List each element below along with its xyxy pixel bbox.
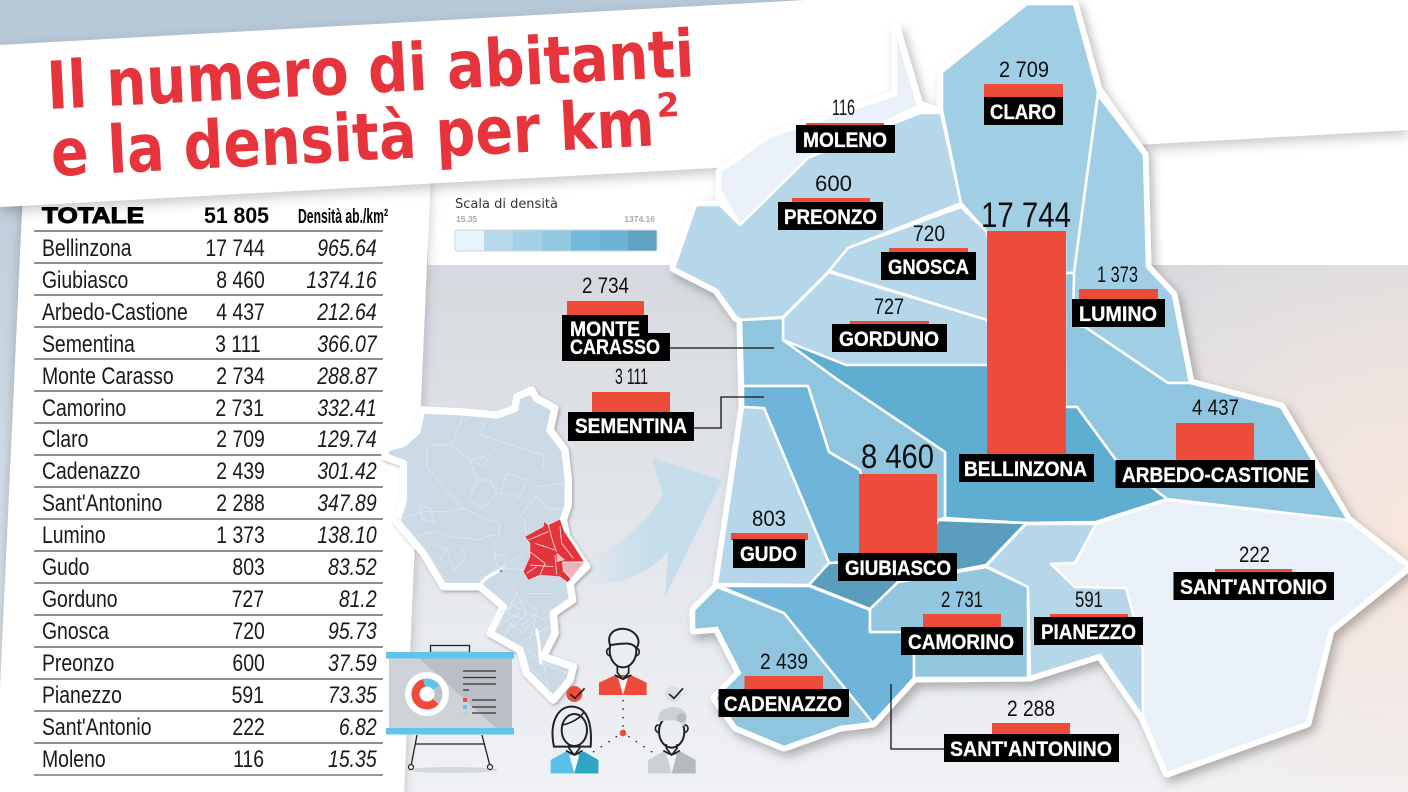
table rows: Sementina	[42, 330, 136, 357]
table rows: 138.10	[317, 521, 377, 548]
label: Camorino: CAMORINO	[908, 631, 1014, 654]
table rows: Giubiasco	[42, 266, 128, 293]
badge: red check	[566, 686, 585, 702]
region: Gudo	[717, 407, 829, 585]
label: Sementina: 3 111	[615, 364, 648, 389]
table rows: Sant'Antonio	[42, 713, 152, 740]
label: Giubiasco: 8 460	[861, 438, 934, 476]
panel: data table	[34, 203, 388, 775]
legend: density scale: Scala di densità	[455, 197, 558, 212]
table header: 51 805	[204, 203, 269, 228]
label: Pianezzo	[1034, 587, 1143, 645]
label: Moleno: MOLENO	[803, 129, 887, 152]
label: Gorduno: GORDUNO	[839, 328, 939, 351]
legend: density scale: 15.35	[456, 214, 478, 224]
region: Pianezzo	[986, 524, 1143, 717]
map white outline	[674, 4, 1408, 773]
table rows: 8 460	[216, 266, 265, 293]
label: Gnosca: GNOSCA	[888, 256, 969, 279]
label: Camorino	[901, 587, 1023, 655]
label: Camorino: 2 731	[941, 587, 983, 612]
label: Monte Carasso: CARASSO	[570, 336, 660, 359]
table rows: 347.89	[317, 489, 377, 516]
table rows: 727	[232, 585, 264, 612]
table rows: Preonzo	[42, 649, 114, 676]
label: Pianezzo: PIANEZZO	[1041, 621, 1136, 644]
label: Sementina: SEMENTINA	[575, 415, 687, 438]
region: Claro	[942, 4, 1098, 273]
table rows: Monte Carasso	[42, 362, 174, 389]
label: Bellinzona: BELLINZONA	[964, 458, 1087, 481]
region: Gnosca	[829, 207, 1000, 320]
label: Lumino: 1 373	[1097, 262, 1138, 287]
label: Gorduno: 727	[874, 294, 904, 319]
table rows: 83.52	[328, 553, 377, 580]
label: Gnosca	[881, 221, 976, 280]
leader line: Sementina	[693, 397, 764, 428]
label: Sementina	[568, 364, 694, 441]
label: Claro: CLARO	[990, 101, 1056, 124]
table rows: Arbedo-Castione	[42, 298, 188, 325]
legend: density scale	[455, 197, 657, 251]
title: e la densità per km	[49, 85, 656, 192]
label: Sant'Antonio	[1174, 542, 1334, 600]
table header: Densità ab./km²	[298, 206, 388, 228]
table rows: 73.35	[328, 681, 377, 708]
table rows: 222	[232, 713, 265, 740]
label: Lumino	[1072, 262, 1165, 327]
leader line: Monte Carasso	[670, 347, 774, 349]
label: Giubiasco	[838, 438, 957, 581]
label: Moleno: 116	[832, 95, 855, 120]
label: Lumino: LUMINO	[1079, 303, 1157, 326]
table rows: 366.07	[317, 330, 377, 357]
label: Cadenazzo: 2 439	[760, 649, 808, 674]
panel: title banner	[0, 0, 1408, 207]
region: Sementina	[743, 386, 880, 563]
table rows: 803	[232, 553, 265, 580]
label: Bellinzona: 17 744	[981, 196, 1071, 235]
label: Sant'Antonio: 222	[1239, 542, 1270, 567]
table rows: Gnosca	[42, 617, 110, 644]
region: Giubiasco	[809, 520, 1026, 609]
label: Sant'Antonino: 2 288	[1007, 696, 1055, 721]
label: Gnosca: 720	[913, 221, 945, 246]
label: Moleno	[796, 95, 895, 153]
label: Claro	[984, 57, 1063, 125]
label: Gudo: GUDO	[740, 543, 797, 566]
person: man grey	[648, 707, 696, 773]
table rows: Camorino	[42, 394, 126, 421]
table rows: 129.74	[317, 425, 377, 452]
label: Giubiasco: GIUBIASCO	[845, 557, 951, 580]
label: Monte Carasso	[562, 273, 670, 361]
legend: density scale: 1374.16	[624, 214, 655, 224]
label: Cadenazzo	[718, 649, 849, 717]
label: Bellinzona	[959, 196, 1094, 482]
region: Camorino	[870, 567, 1028, 678]
table rows: 212.64	[316, 298, 377, 325]
label: Preonzo	[778, 171, 883, 230]
lakes	[480, 569, 541, 663]
table rows: 3 111	[215, 330, 261, 357]
arrow: from Ticino map to detail map	[588, 458, 722, 597]
table rows: 2 439	[216, 457, 265, 484]
table rows: 4 437	[216, 298, 265, 325]
label: Sant'Antonino	[944, 696, 1119, 762]
label: Monte Carasso: 2 734	[582, 273, 629, 298]
label: Preonzo: PREONZO	[784, 206, 877, 229]
label: Sant'Antonio: SANT'ANTONIO	[1180, 576, 1327, 599]
region: Preonzo	[674, 113, 961, 320]
region: Moleno	[720, 30, 918, 225]
donut chart icon	[405, 672, 449, 716]
map: Bellinzona district	[562, 4, 1408, 773]
label: Arbedo-Castione: ARBEDO-CASTIONE	[1122, 464, 1309, 487]
table rows: 17 744	[205, 234, 265, 261]
table rows: 6.82	[339, 713, 377, 740]
table rows: Sant'Antonino	[42, 489, 162, 516]
table rows: Pianezzo	[42, 681, 122, 708]
table rows: Gudo	[42, 553, 89, 580]
region: Monte Carasso	[741, 318, 945, 560]
region: Bellinzona	[783, 340, 1167, 523]
table rows: 2 709	[216, 425, 265, 452]
region: Sant'Antonino	[719, 586, 914, 723]
person: man red	[599, 629, 647, 695]
region: Arbedo-Castione	[1065, 273, 1348, 520]
leader line: Sant'Antonino	[891, 684, 945, 749]
label: Claro: 2 709	[999, 57, 1049, 82]
label: Gudo	[731, 506, 808, 568]
table rows: 591	[232, 681, 264, 708]
icon: people network	[551, 629, 696, 773]
table rows: 1374.16	[306, 266, 377, 293]
table rows: 2 731	[215, 394, 264, 421]
dotted connectors	[593, 700, 652, 752]
label: Cadenazzo: CADENAZZO	[724, 693, 842, 716]
table header	[42, 203, 388, 228]
table rows: 301.42	[317, 457, 377, 484]
table rows	[42, 234, 377, 772]
table rows: 2 734	[216, 362, 265, 389]
table rows: 81.2	[339, 585, 377, 612]
table rows: Lumino	[42, 521, 106, 548]
title: Il numero di abitanti	[45, 15, 696, 125]
map: Ticino canton locator	[385, 390, 587, 700]
table rows: 965.64	[317, 234, 377, 261]
label: Preonzo: 600	[815, 171, 852, 196]
table rows: Claro	[42, 425, 88, 452]
table rows: Moleno	[42, 745, 106, 772]
region: Cadenazzo	[694, 587, 873, 747]
table rows: 2 288	[216, 489, 265, 516]
table rows: Cadenazzo	[42, 457, 140, 484]
table rows: 15.35	[328, 745, 377, 772]
table rows: 600	[232, 649, 265, 676]
table rows: 37.59	[328, 649, 377, 676]
icon: presentation board	[386, 646, 514, 773]
table rows: 288.87	[316, 362, 377, 389]
table rows: 332.41	[317, 394, 377, 421]
table rows: 116	[233, 745, 264, 772]
label: Gorduno	[832, 294, 947, 352]
table rows: 1 373	[216, 521, 265, 548]
region: Gorduno	[783, 272, 1000, 365]
label: Arbedo-Castione: 4 437	[1192, 395, 1239, 420]
title: 2	[655, 85, 680, 125]
label: Arbedo-Castione	[1116, 395, 1315, 488]
region: Lumino	[1073, 95, 1190, 383]
region: Sant'Antonio	[1051, 500, 1408, 773]
table rows: Gorduno	[42, 585, 118, 612]
Bellinzona district highlighted	[523, 519, 584, 582]
title	[45, 15, 696, 192]
table rows: Bellinzona	[42, 234, 132, 261]
label: Gudo: 803	[752, 506, 786, 531]
table rows: 95.73	[328, 617, 377, 644]
label: Pianezzo: 591	[1075, 587, 1103, 612]
badge: grey check	[665, 686, 683, 702]
table rows: 720	[232, 617, 265, 644]
Ticino outline	[385, 390, 587, 700]
label: Monte Carasso: MONTE	[570, 318, 640, 341]
panel: table background	[0, 170, 431, 792]
person: woman blue	[551, 707, 598, 773]
table header: TOTALE	[42, 203, 144, 228]
label: Sant'Antonino: SANT'ANTONINO	[950, 738, 1112, 761]
